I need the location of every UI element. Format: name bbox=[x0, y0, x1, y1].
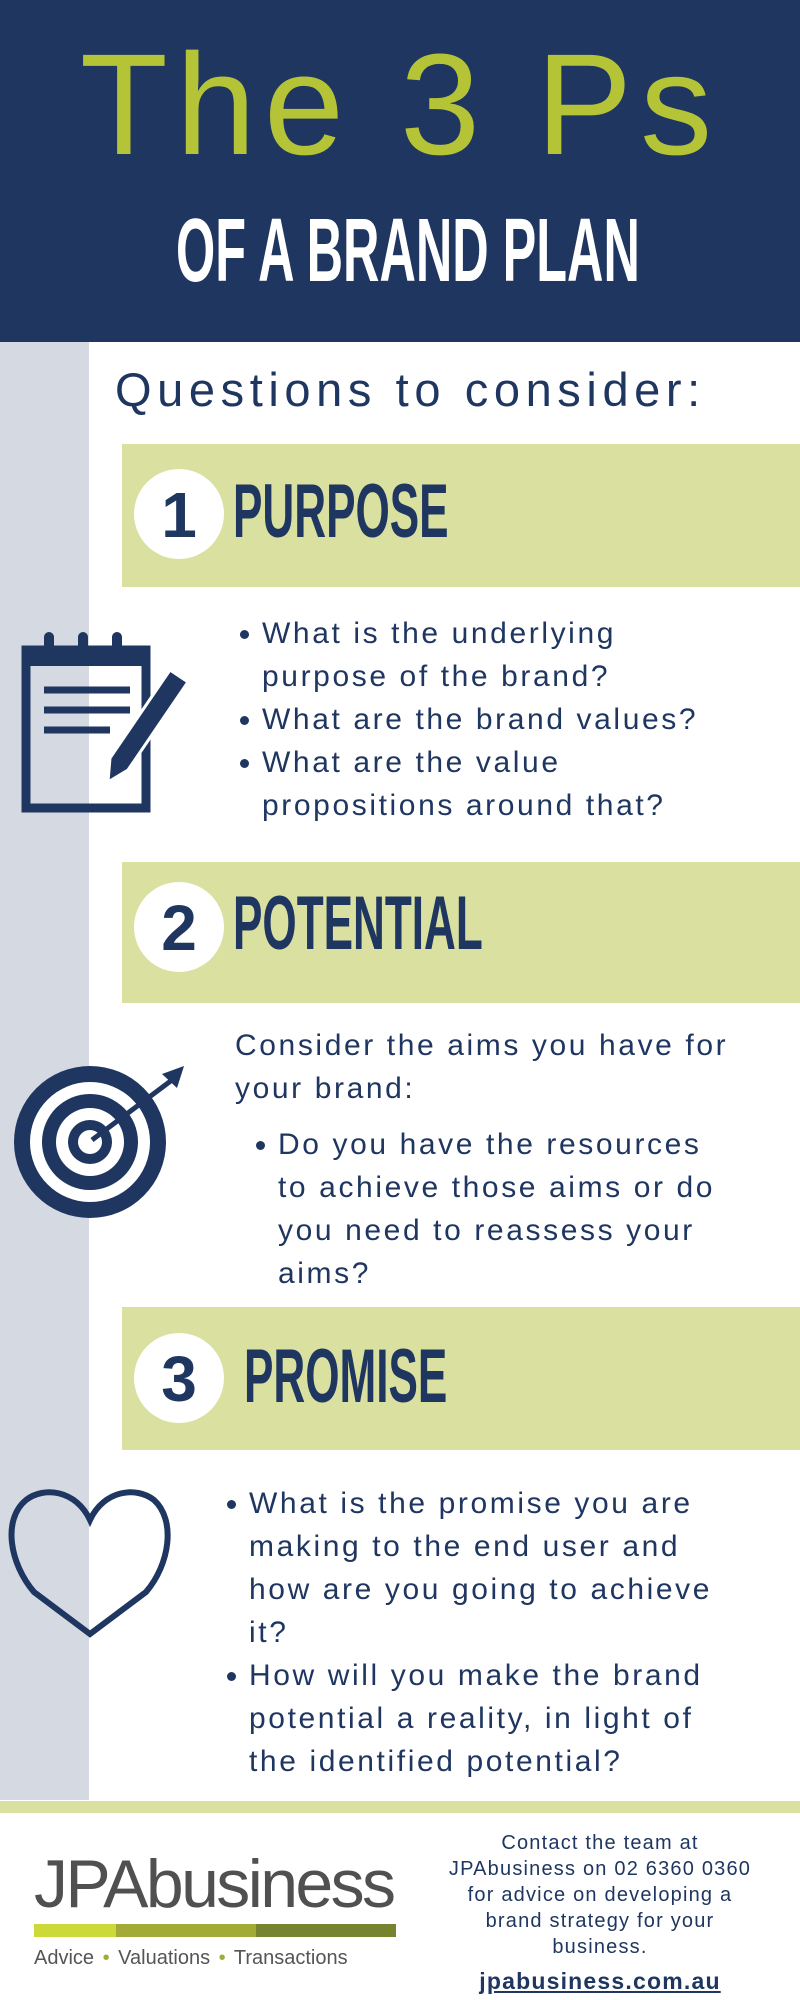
text: promise bullets bbox=[227, 1487, 712, 1778]
contact text: for advice on developing a bbox=[468, 1884, 732, 1906]
text: potential: you need to reassess your bbox=[278, 1214, 695, 1247]
number 2: 2 bbox=[161, 892, 197, 964]
heading purpose: PURPOSE bbox=[233, 469, 449, 554]
icon: target bbox=[14, 1066, 184, 1218]
text: potential: your brand: bbox=[235, 1072, 415, 1105]
text: potential: aims? bbox=[278, 1257, 371, 1290]
footer green line bbox=[0, 1801, 800, 1813]
text: promise bullets: the identified potential? bbox=[249, 1745, 623, 1778]
text: purpose bullets: What are the value bbox=[262, 746, 561, 779]
text: promise bullets: How will you make the brand bbox=[249, 1659, 703, 1692]
left gray strip bbox=[0, 342, 89, 1800]
text: potential bbox=[235, 1029, 728, 1290]
text: purpose bullets: propositions around that? bbox=[262, 789, 666, 822]
text: purpose bullets: What is the underlying bbox=[262, 617, 616, 650]
number 2 bbox=[134, 882, 224, 972]
contact text: Contact the team at bbox=[501, 1832, 699, 1854]
contact text bbox=[449, 1832, 751, 1994]
footer logo: Advice • Valuations • Transactions bbox=[34, 1947, 348, 1969]
footer logo: JPAbusiness bbox=[34, 1846, 393, 1922]
number 3 bbox=[134, 1333, 224, 1423]
text: promise bullets: making to the end user and bbox=[249, 1530, 680, 1563]
heading promise: PROMISE bbox=[244, 1334, 447, 1419]
text: purpose bullets: What are the brand values? bbox=[262, 703, 698, 736]
intro heading: Questions to consider: bbox=[115, 363, 706, 416]
footer logo bbox=[34, 1846, 396, 1969]
number 3: 3 bbox=[161, 1343, 197, 1415]
header bbox=[0, 0, 800, 342]
icon: notepad bbox=[22, 632, 186, 812]
number 1: 1 bbox=[161, 479, 197, 551]
website link: jpabusiness.com.au bbox=[479, 1968, 721, 1994]
panel: purpose band bbox=[122, 444, 800, 587]
text: promise bullets: What is the promise you are bbox=[249, 1487, 693, 1520]
text: promise bullets: it? bbox=[249, 1616, 288, 1649]
panel: promise band bbox=[122, 1307, 800, 1450]
text: purpose bullets bbox=[240, 617, 698, 822]
text: purpose bullets: purpose of the brand? bbox=[262, 660, 610, 693]
icon: heart bbox=[8, 1489, 171, 1638]
text: potential: Do you have the resources bbox=[278, 1128, 702, 1161]
panel: potential band bbox=[122, 862, 800, 1003]
contact text: business. bbox=[552, 1936, 648, 1958]
text: potential: to achieve those aims or do bbox=[278, 1171, 715, 1204]
title: The 3 Ps bbox=[80, 24, 720, 185]
heading potential: POTENTIAL bbox=[233, 881, 483, 966]
text: promise bullets: potential a reality, in light of bbox=[249, 1702, 694, 1735]
contact text: brand strategy for your bbox=[486, 1910, 714, 1932]
subtitle: OF A BRAND PLAN bbox=[176, 201, 640, 301]
text: potential: Consider the aims you have for bbox=[235, 1029, 728, 1062]
text: promise bullets: how are you going to achieve bbox=[249, 1573, 712, 1606]
number 1 bbox=[134, 469, 224, 559]
contact text: JPAbusiness on 02 6360 0360 bbox=[449, 1858, 751, 1880]
